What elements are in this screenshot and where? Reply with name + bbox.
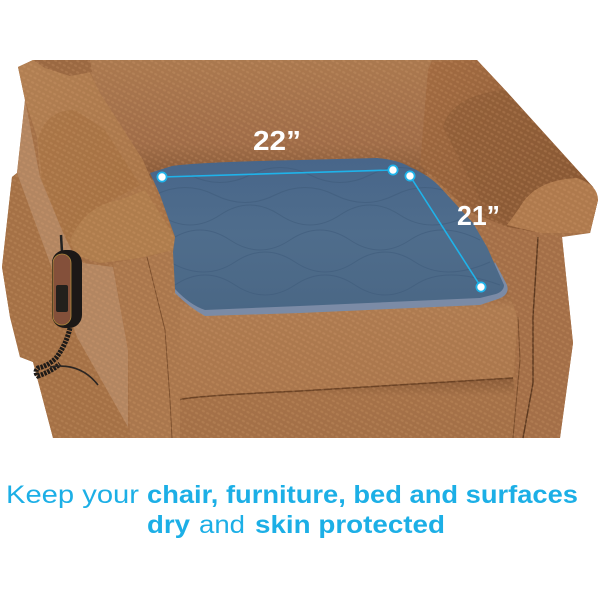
infographic canvas	[2, 60, 598, 538]
remote face	[53, 254, 71, 325]
width left dot	[157, 172, 167, 182]
left arm end cap	[70, 190, 175, 263]
depth measurement	[405, 171, 500, 292]
caption line two: and	[199, 511, 245, 539]
right column inner seam	[513, 317, 520, 438]
left side panel	[2, 173, 130, 438]
quilting	[155, 168, 500, 295]
remote body	[52, 250, 82, 328]
right column stitch	[523, 237, 538, 438]
right arm	[420, 60, 598, 233]
left front column	[113, 250, 180, 438]
chair base silhouette	[2, 60, 598, 438]
left column seam	[147, 257, 172, 438]
left arm	[18, 60, 175, 263]
recliner chair	[2, 60, 598, 438]
left arm plush	[38, 110, 140, 250]
width measurement	[157, 125, 398, 182]
caption line one: Keep your	[6, 481, 139, 509]
seat pad	[150, 158, 508, 316]
depth line	[410, 176, 481, 287]
pad body	[150, 158, 504, 310]
right arm upper plush	[443, 90, 590, 222]
remote top cable	[61, 235, 62, 252]
back cushion	[85, 60, 432, 180]
left headrest fold	[33, 60, 92, 76]
right front column	[465, 210, 573, 438]
pad binding edge	[175, 262, 508, 316]
remote cord coil	[36, 328, 70, 376]
caption line two: dry	[147, 511, 190, 539]
depth top dot	[405, 171, 415, 181]
lower panel seam	[178, 378, 513, 400]
depth label: 21”	[457, 200, 500, 231]
caption	[6, 481, 578, 539]
caption line one: chair, furniture, bed and surfaces	[147, 481, 578, 509]
width label: 22”	[253, 125, 301, 156]
right arm end cap	[507, 178, 598, 233]
width line	[162, 170, 393, 177]
remote cable	[50, 366, 98, 385]
remote buttons	[56, 285, 68, 312]
remote control	[36, 235, 98, 385]
depth bottom dot	[476, 282, 486, 292]
caption line two: skin protected	[255, 511, 445, 539]
lower front panel	[178, 378, 522, 438]
seat cushion	[170, 285, 518, 400]
fabric texture	[2, 60, 598, 438]
left outer arm panel	[17, 100, 128, 427]
width right dot	[388, 165, 398, 175]
